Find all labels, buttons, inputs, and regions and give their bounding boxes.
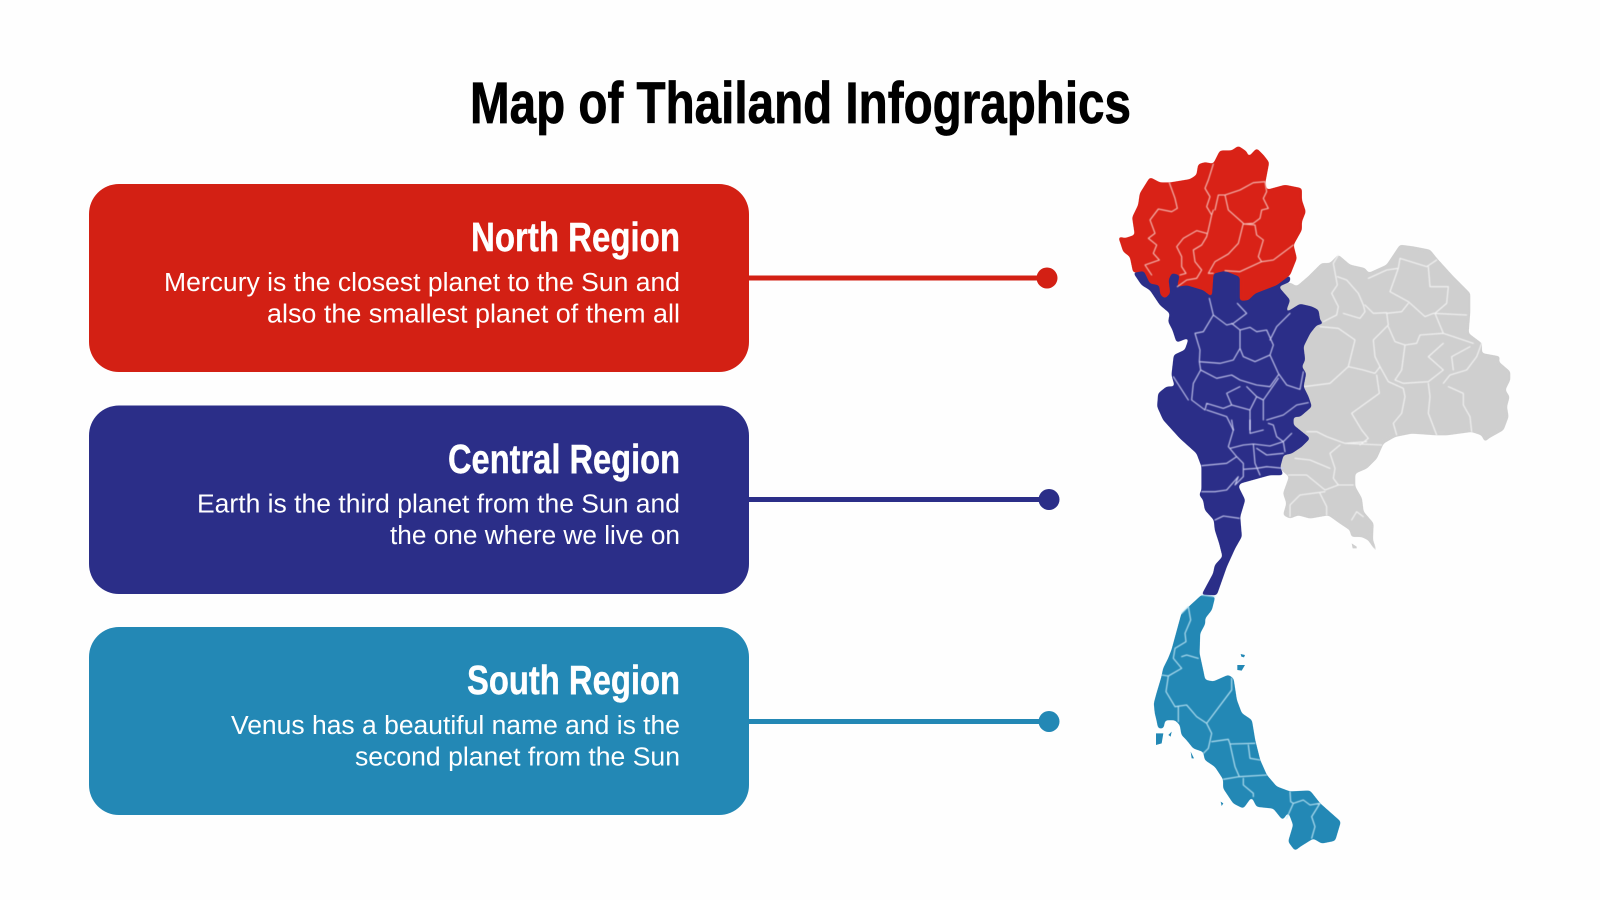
north description: Mercury is the closest planet to the Sun and — [164, 269, 680, 297]
connector: south — [748, 711, 1060, 732]
central panel background — [89, 406, 749, 594]
south panel background — [89, 627, 749, 815]
title: Map of Thailand Infographics — [470, 71, 1131, 136]
south heading: South Region — [467, 657, 680, 703]
map region: north (red) — [1118, 146, 1306, 301]
panel: north region — [89, 184, 749, 372]
central description — [197, 490, 680, 550]
north description: also the smallest planet of them all — [267, 300, 680, 328]
map region: central (blue) — [1133, 271, 1324, 595]
map region: south (teal) — [1154, 595, 1341, 851]
north description — [164, 269, 680, 328]
north heading: North Region — [471, 214, 680, 260]
map region: northeast and east (grey) — [1273, 245, 1510, 555]
map of Thailand — [1118, 146, 1510, 851]
central description: Earth is the third planet from the Sun and — [197, 490, 680, 518]
north panel background — [89, 184, 749, 372]
connector: north — [748, 268, 1058, 288]
south description: Venus has a beautiful name and is the — [231, 712, 680, 740]
connector: central — [748, 489, 1060, 510]
central description: the one where we live on — [390, 522, 680, 550]
panel: south region — [89, 627, 749, 815]
south description — [231, 712, 680, 772]
south description: second planet from the Sun — [355, 744, 680, 772]
central heading: Central Region — [448, 436, 680, 482]
panel: central region — [89, 406, 749, 594]
